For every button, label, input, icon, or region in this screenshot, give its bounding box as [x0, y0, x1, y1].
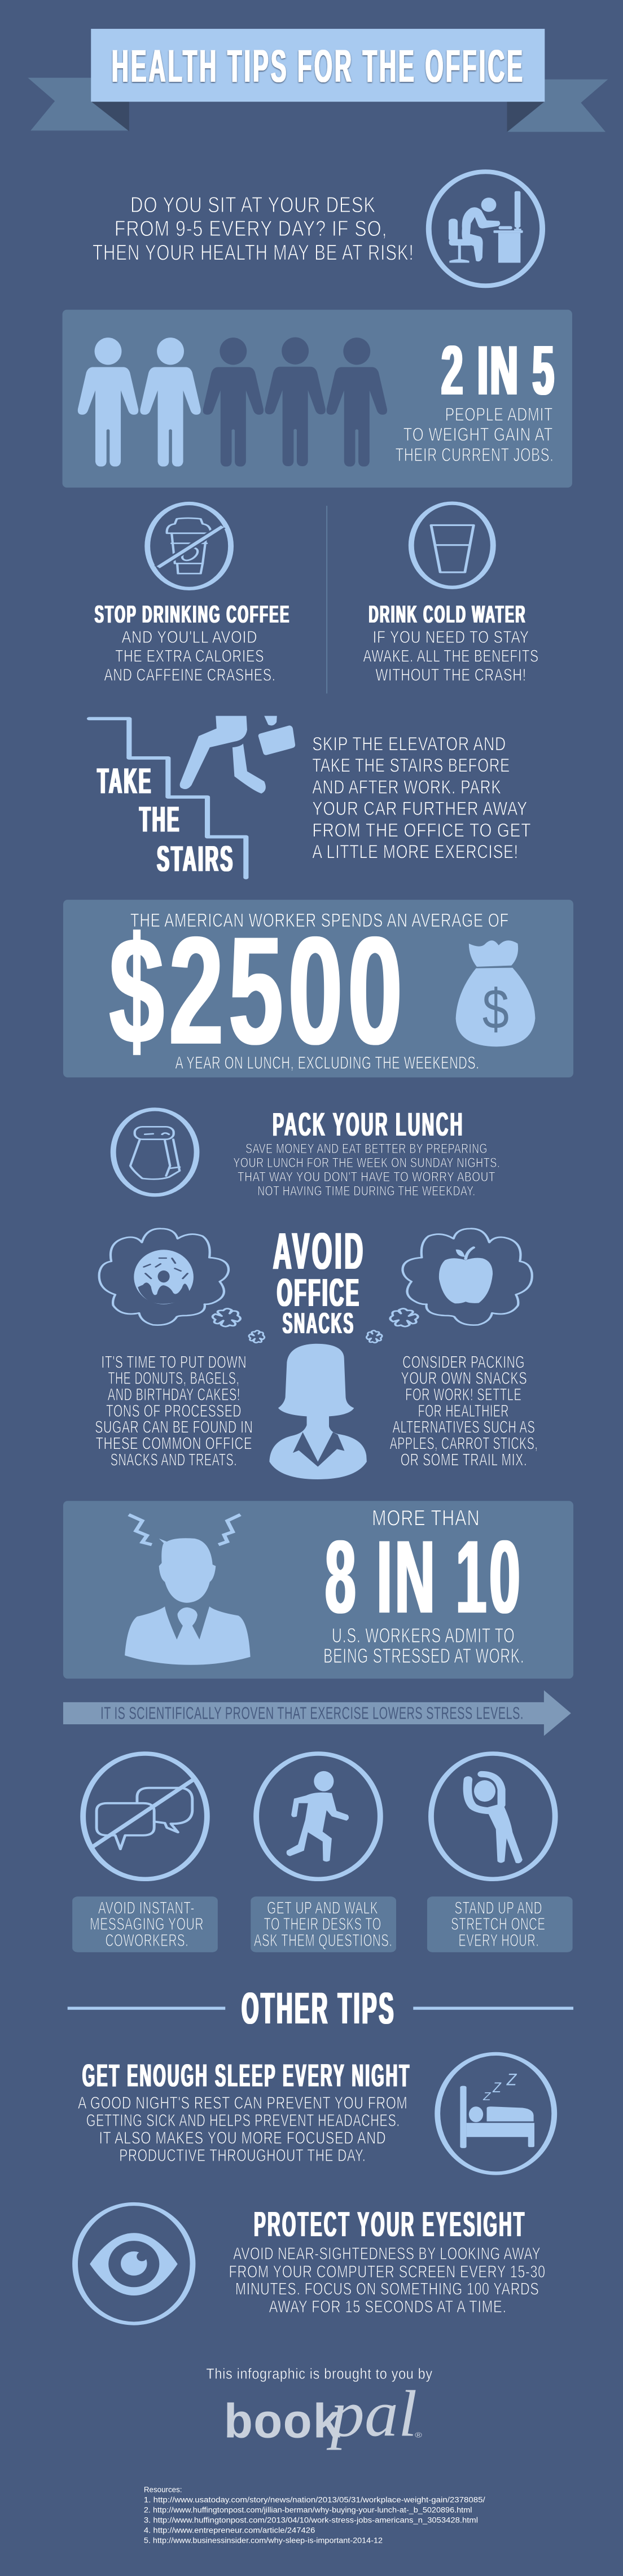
icon: running legs with briefcase	[180, 716, 295, 794]
icon: no coffee	[147, 503, 231, 589]
text: stairs	[312, 733, 531, 862]
icon: lunch bag	[113, 1110, 197, 1195]
logo: bookpal	[223, 2377, 422, 2452]
icon: sleeping in bed: Z	[482, 2089, 492, 2103]
icon: no instant messaging	[83, 1754, 207, 1879]
text: left of woman	[95, 1353, 253, 1469]
icon: staircase	[89, 719, 246, 878]
text: pack your lunch	[233, 1141, 500, 1198]
stat caption: PEOPLE ADMIT	[445, 404, 553, 425]
icon: money bag	[456, 940, 535, 1046]
text: eyesight	[229, 2245, 546, 2316]
section: header and intro	[28, 29, 608, 488]
text: resources: Resources:	[144, 2485, 182, 2494]
panel: 8 in 10	[63, 1501, 573, 1679]
text: water	[363, 628, 539, 685]
section: coffee, water, stairs	[89, 503, 539, 879]
heading: take the stairs	[98, 761, 234, 879]
section: office snacks: IT'S TIME TO PUT DOWN	[102, 1353, 247, 1372]
section: office snacks: THE DONUTS, BAGELS,	[108, 1369, 240, 1388]
text: right of woman	[390, 1353, 538, 1469]
panel: walk to desks: ASK THEM QUESTIONS.	[254, 1931, 393, 1950]
section: office snacks: TONS OF PROCESSED	[106, 1401, 242, 1421]
text: stress caption	[323, 1624, 524, 1667]
icon: sleeping in bed: Z	[492, 2080, 502, 2095]
intro text	[93, 192, 414, 265]
icon: five people	[78, 338, 387, 467]
section: coffee, water, stairs: AND CAFFEINE CRASHES.	[104, 665, 276, 685]
section: footer	[144, 2365, 485, 2544]
icon: eye	[75, 2204, 192, 2324]
panel: walk to desks: TO THEIR DESKS TO	[264, 1915, 381, 1934]
icon: sleeping in bed: Z	[506, 2071, 517, 2089]
intro text: THEN YOUR HEALTH MAY BE AT RISK!	[93, 240, 414, 265]
heading: avoid office snacks	[273, 1223, 366, 1339]
intro text: FROM 9-5 EVERY DAY? IF SO,	[115, 216, 387, 241]
ribbon: title banner	[91, 29, 545, 102]
panel: avoid instant messaging	[72, 1896, 218, 1952]
text: resources: 5. http://www.businessinsider.com/why-sleep-is-important-2014-12	[144, 2536, 383, 2544]
text: more than: MORE THAN	[372, 1505, 480, 1530]
panel: avoid instant messaging: COWORKERS.	[106, 1931, 188, 1950]
section: other tips	[68, 1983, 573, 2324]
divider	[326, 506, 327, 694]
intro text: DO YOU SIT AT YOUR DESK	[130, 192, 376, 217]
panel: 2 in 5	[63, 310, 572, 488]
icon: walking figure	[256, 1754, 380, 1879]
panel: avoid instant messaging: MESSAGING YOUR	[90, 1915, 204, 1934]
ribbon: right tail	[507, 80, 608, 132]
text: coffee: AND YOU'LL AVOID	[121, 628, 257, 647]
arrow banner	[63, 1690, 571, 1736]
heading: other tips	[68, 1983, 573, 2033]
panel: $2500	[63, 900, 573, 1077]
icon: sleeping in bed	[437, 2054, 554, 2174]
panel: stand and stretch	[427, 1896, 573, 1952]
logo: bookpal: ®	[415, 2430, 422, 2439]
panel: avoid instant messaging: AVOID INSTANT-	[98, 1899, 195, 1917]
icon: glass of water	[411, 503, 493, 588]
section: office snacks	[95, 1223, 538, 1479]
panel: stand and stretch: EVERY HOUR.	[459, 1931, 539, 1950]
section: office snacks: THESE COMMON OFFICE	[96, 1434, 252, 1453]
section: office snacks: SNACKS	[283, 1307, 355, 1339]
section: coffee, water, stairs: STAIRS	[157, 839, 234, 879]
ribbon: left fold	[91, 102, 129, 131]
text: coffee: THE EXTRA CALORIES	[115, 647, 264, 665]
panel: walk to desks: GET UP AND WALK	[267, 1899, 378, 1917]
logo: bookpal: pal	[326, 2377, 417, 2450]
section: office snacks: AND BIRTHDAY CAKES!	[108, 1385, 240, 1404]
text: coffee	[104, 628, 276, 685]
panel: stand and stretch: STAND UP AND	[454, 1899, 542, 1917]
ribbon: left tail	[28, 78, 128, 130]
text: resources	[144, 2485, 485, 2544]
logo: bookpal: book	[223, 2398, 342, 2452]
icon: money bag: $	[482, 978, 509, 1041]
section: office snacks: OFFICE	[277, 1271, 361, 1315]
heading: take the stairs: TAKE	[98, 761, 152, 801]
ribbon: right fold	[507, 102, 545, 132]
section: office snacks: SUGAR CAN BE FOUND IN	[95, 1418, 253, 1436]
icon: woman silhouette	[269, 1344, 367, 1479]
icon: apple thought cloud	[366, 1229, 532, 1343]
icon: donut thought cloud	[99, 1229, 265, 1343]
section: stress	[63, 1501, 573, 1952]
icon: stressed man	[125, 1515, 251, 1665]
section: office snacks: SNACKS AND TREATS.	[111, 1451, 237, 1469]
heading: take the stairs: THE	[139, 799, 181, 839]
text: resources: 4. http://www.entrepreneur.com/article/247426	[144, 2526, 315, 2534]
icon: worker at desk	[429, 172, 542, 286]
icon: stretching figure	[431, 1754, 555, 1879]
stat caption	[396, 404, 554, 465]
section: office snacks: AVOID	[273, 1223, 366, 1280]
section: lunch	[63, 900, 573, 1198]
panel: walk to desks	[251, 1896, 396, 1952]
text: sleep	[78, 2093, 407, 2165]
